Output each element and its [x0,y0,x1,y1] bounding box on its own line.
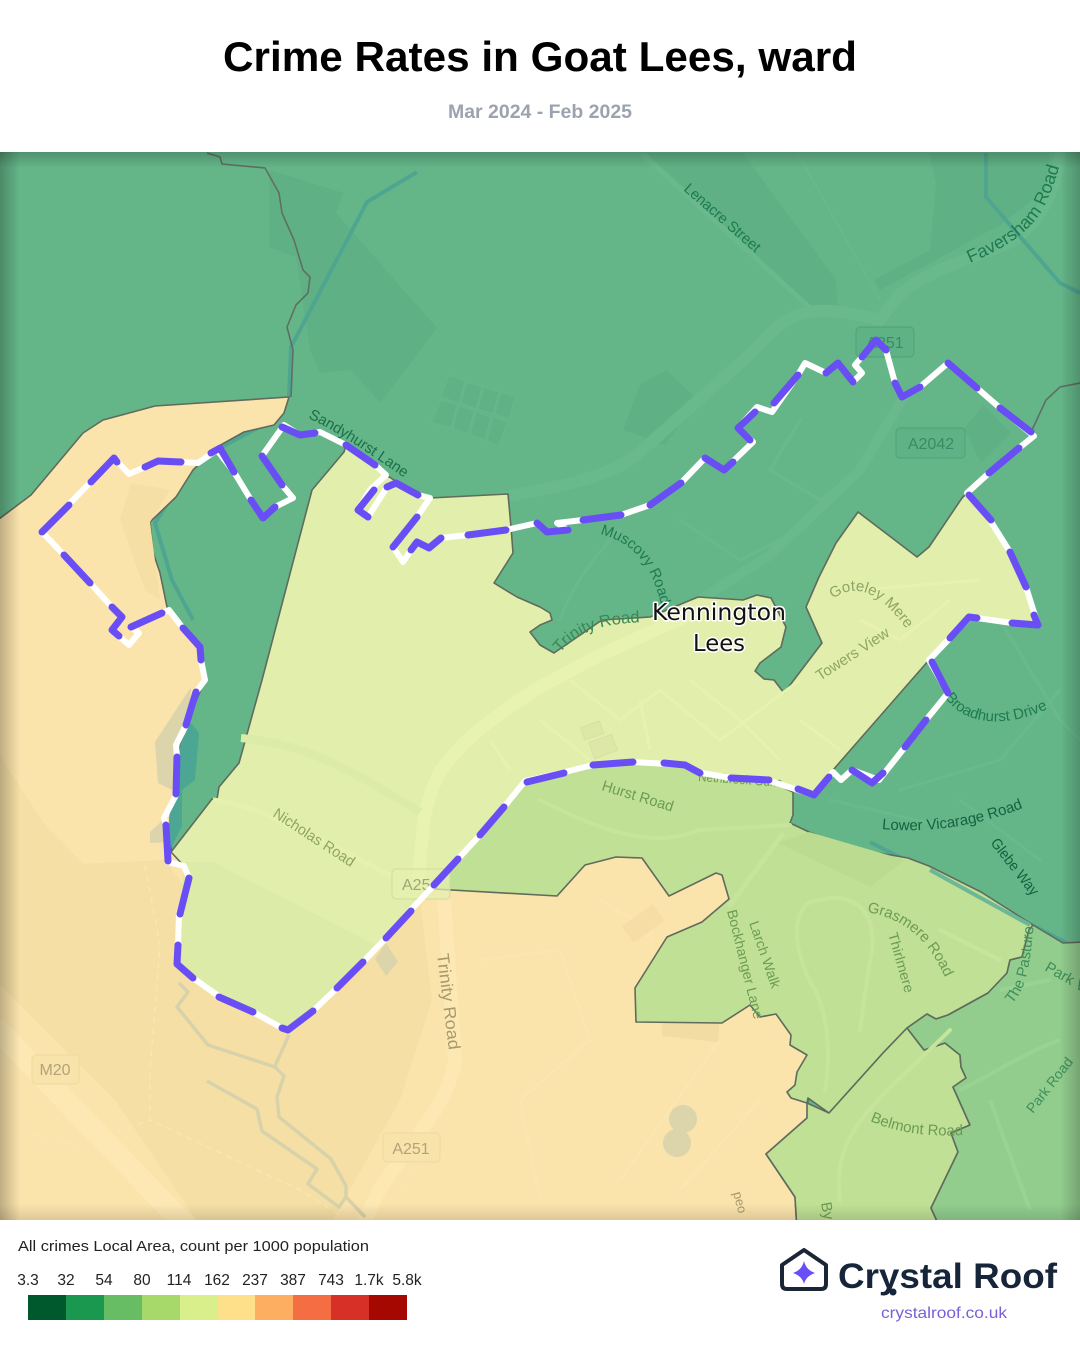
tan dashed paths [138,865,337,1214]
light green crime band [434,762,1033,1230]
tan terrain shading [149,518,155,560]
icon: house with star [782,1250,826,1289]
legend tick labels: 387 [280,1272,306,1289]
label: The Pasture: The Pasture [1004,926,1034,1001]
legend tick labels: 80 [133,1272,151,1289]
light green roads [789,823,952,1050]
wordmark: Crystal Roof [838,1257,1057,1296]
legend tick labels: 54 [95,1272,113,1289]
legend tick labels: 3.3 [17,1272,39,1289]
legend tick labels: 743 [318,1272,344,1289]
legend heading: All crimes Local Area, count per 1000 population [18,1238,369,1255]
label: Nicholas Road: Nicholas Road [270,805,358,871]
legend tick labels: 162 [204,1272,230,1289]
label: Larch Walk: Larch Walk [746,919,784,991]
map base: dark green crime band [0,152,1080,1110]
legend [17,1238,422,1320]
label: Towers View: Towers View [813,624,893,684]
tan crime band [0,397,815,1230]
boundary line north [207,153,1080,430]
label: Glebe Way: Glebe Way [987,835,1042,899]
map panel [0,152,1080,1220]
legend tick labels: 1.7k [354,1272,384,1289]
label: Nethbrook partially hidden: Nethbrook Gdns [698,769,783,790]
place label: Kennington Lees: Kennington [652,600,786,626]
website url: crystalroof.co.uk [881,1305,1008,1322]
place label: Kennington Lees: Lees [693,631,745,657]
label: Trinity Road south: Trinity Road [433,952,464,1051]
lime zone roads [213,684,792,800]
medium green roads [960,980,1060,1210]
label: Lenacre Street: Lenacre Street [680,180,765,257]
badge: M20: M20 [39,1062,71,1079]
terrain patches on green [269,153,1050,463]
ward boundary: purple dashes [42,340,1038,1030]
logo y tail dot [890,1288,896,1296]
grey lakes and patches [150,687,720,1157]
ward boundary: white line [42,340,1038,1030]
road labels [266,164,1080,1219]
label: Goteley Mere: Goteley Mere [830,581,912,628]
badge: M20 [32,1055,79,1084]
grey-green streams [177,983,365,1217]
title: Crime Rates in Goat Lees, ward [223,33,857,80]
main roads on green [646,292,838,442]
badge: A251 south: A251 [392,1141,430,1158]
river on boundary [930,870,1030,925]
label: Trinity Road: Trinity Road [552,610,639,650]
legend tick labels: 114 [167,1272,192,1289]
label: Broadhurst Drive: Broadhurst Drive [946,692,1046,722]
label: Muscovy Road: Muscovy Road [601,524,672,604]
river lines [155,153,1080,957]
map edge vignette [0,152,1080,1220]
label: Faversham Road: Faversham Road [966,164,1059,262]
medium green crime band [907,925,1080,1230]
badge: A2042: A2042 [908,436,954,453]
label: By partial: By [817,1201,837,1221]
label: Park Road: Park Road [1023,1054,1076,1116]
M20 and A251 roads on tan [0,900,760,1230]
label: Grasmere Road: Grasmere Road [868,902,954,976]
label: Hurst Road: Hurst Road [600,778,676,815]
badge: A25: A25 [402,877,431,894]
label: Sandyhurst Lane: Sandyhurst Lane [310,410,407,476]
lime shading patch [180,873,186,896]
place label: Kennington Lees [652,600,786,657]
badge: A25 [392,869,450,899]
label: Belmont Road: Belmont Road [871,1112,962,1136]
legend tick labels: 5.8k [392,1272,422,1289]
legend tick labels [17,1272,422,1289]
light green darker patch [779,832,891,856]
legend tick labels: 237 [242,1272,268,1289]
badge: A251 north: A251 [866,335,904,352]
brand logo [782,1250,1057,1322]
teal water patch [169,723,199,850]
legend colour scale [28,1295,407,1320]
label: peo partial: peo [730,1190,750,1215]
lime crime band [171,448,1033,946]
label: Thirlmere: Thirlmere [885,930,918,995]
label: Lower Vicarage Road: Lower Vicarage Road [883,798,1022,830]
subtitle: date range: Mar 2024 - Feb 2025 [448,102,632,123]
buildings in lime zone [581,721,617,759]
badge: A251 south [383,1133,440,1162]
allotment field grid [431,375,515,446]
badge: A2042 [896,428,965,458]
label: Bockhanger Lane: Bockhanger Lane [724,908,767,1021]
badge: A251 north [856,327,914,357]
legend tick labels: 32 [57,1272,75,1289]
